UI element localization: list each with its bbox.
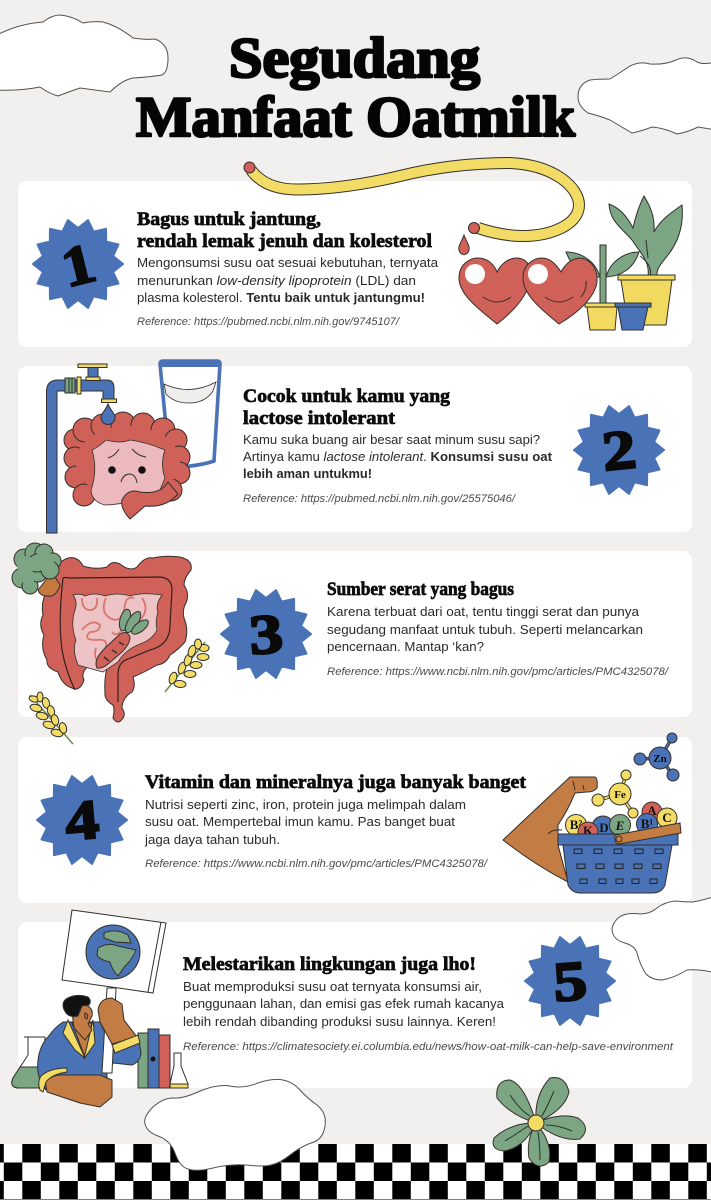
badge 5 [525, 937, 615, 1025]
icon: wheat right [165, 639, 209, 692]
body text 5: penggunaan lahan, dan emisi gas efek rumah kacanya [183, 997, 504, 1011]
panel 5: lingkungan [12, 896, 711, 1107]
body text 2: Kamu suka buang air besar saat minum susu sapi? [243, 433, 540, 447]
badge 3: 3 [247, 603, 285, 667]
body text 1: Mengonsumsi susu oat sesuai kebutuhan, ternyata [137, 256, 438, 270]
panel 3: serat [12, 543, 692, 744]
body text 5: Buat memproduksi susu oat ternyata konsumsi air, [183, 980, 482, 994]
cloud: top left [0, 15, 168, 96]
panel 1: jantung [18, 181, 692, 347]
badge 1 [33, 220, 123, 308]
heading 4: Vitamin dan mineralnya juga banyak banget [145, 773, 527, 793]
heading 2: Cocok untuk kamu yang [243, 387, 451, 407]
heading 1 [137, 210, 432, 252]
icon: carrot [96, 608, 151, 668]
icon: wheat left [28, 692, 73, 744]
reference 3: Reference: https://www.ncbi.nlm.nih.gov/pmc/articles/PMC4325078/ [327, 666, 669, 678]
title: Manfaat Oatmilk [136, 86, 575, 149]
hose [244, 162, 579, 236]
title: Segudang [229, 27, 480, 90]
icon: hearts [459, 258, 597, 324]
body text 2: Artinya kamu lactose intolerant . Konsumsi susu oat [243, 450, 553, 464]
icon: books [138, 1029, 188, 1088]
badge 3 [221, 590, 311, 678]
badge 4: 4 [63, 789, 101, 853]
body text 5: lebih rendah dibanding produksi susu lainnya. Keren! [183, 1015, 496, 1029]
icon: vitamin balls [566, 802, 677, 842]
body text 3: Karena terbuat dari oat, tentu tinggi serat dan punya [327, 605, 639, 619]
icon: vitamin balls: D [599, 820, 609, 835]
heading 3: Sumber serat yang bagus [327, 580, 514, 600]
heading 1: rendah lemak jenuh dan kolesterol [137, 232, 432, 252]
icon: person [38, 995, 141, 1107]
reference 1: Reference: https://pubmed.ncbi.nlm.nih.gov/9745107/ [137, 316, 400, 328]
icon: iron molecule: Fe [614, 789, 626, 801]
icon: zinc molecule: Zn [653, 753, 667, 765]
heading 1: Bagus untuk jantung, [137, 210, 321, 230]
heading 2: lactose intolerant [243, 409, 396, 429]
body text 1 [137, 256, 438, 305]
icon: glass of milk [160, 361, 220, 468]
icon: sign with globe [62, 910, 166, 1073]
heading 2 [243, 387, 451, 429]
title [136, 27, 575, 149]
icon: sad intestine [64, 412, 190, 519]
body text 4: Nutrisi seperti zinc, iron, protein juga melimpah dalam [145, 798, 466, 812]
body text 3: segudang manfaat untuk tubuh. Seperti melancarkan [327, 623, 643, 637]
icon: iron molecule [592, 770, 638, 818]
cloud: top right [578, 58, 711, 134]
panel 4: vitamin [18, 733, 692, 903]
icon: water drop [101, 404, 115, 424]
icon: flexing arm [503, 777, 597, 882]
panel 2: lactose [18, 361, 692, 533]
body text 3: pencernaan. Mantap ‘kan? [327, 640, 484, 654]
heading 5: Melestarikan lingkungan juga lho! [183, 955, 476, 975]
icon: blood drop [459, 235, 469, 254]
body text 4 [144, 798, 466, 847]
icon: vitamin balls: E [615, 818, 625, 833]
cloud: bottom [145, 1079, 325, 1170]
body text 3 [327, 605, 643, 654]
body text 2 [243, 433, 553, 481]
icon: water tap [46, 364, 116, 533]
icon: vitamin balls: C [662, 810, 672, 825]
body text 1: menurunkan low-density lipoprotein (LDL) dan [137, 274, 416, 288]
icon: colon [41, 556, 191, 722]
badge 1: 1 [55, 232, 102, 300]
icon: plants [566, 196, 682, 330]
body text 4: susu oat. Mempertebal imun kamu. Pas banget buat [145, 815, 456, 829]
body text 1: plasma kolesterol. Tentu baik untuk jantungmu! [137, 291, 425, 305]
icon: vitamin balls: B¹ [641, 816, 653, 831]
icon: zinc molecule [634, 733, 679, 781]
body text 4: jaga daya tahan tubuh. [144, 833, 280, 847]
badge 2: 2 [599, 419, 639, 483]
body text 2: lebih aman untukmu! [243, 467, 372, 481]
icon: broccoli [12, 543, 61, 596]
icon: flask left [12, 1037, 45, 1088]
badge 2 [574, 406, 664, 494]
icon: basket [558, 823, 681, 893]
badge 5: 5 [551, 950, 589, 1014]
reference 4: Reference: https://www.ncbi.nlm.nih.gov/pmc/articles/PMC4325078/ [145, 858, 488, 870]
icon: vitamin balls: B² [570, 817, 582, 832]
cloud: middle right [612, 896, 711, 980]
badge 4 [37, 776, 127, 864]
checkered border [0, 1144, 711, 1200]
reference 2: Reference: https://pubmed.ncbi.nlm.nih.gov/25575046/ [243, 493, 516, 505]
body text 5 [183, 980, 504, 1029]
reference 5: Reference: https://climatesociety.ei.columbia.edu/news/how-oat-milk-can-help-save-environment [183, 1041, 674, 1053]
icon: flower [493, 1078, 586, 1166]
icon: vitamin balls: A [647, 803, 657, 818]
icon: vitamin balls: K [583, 823, 594, 838]
